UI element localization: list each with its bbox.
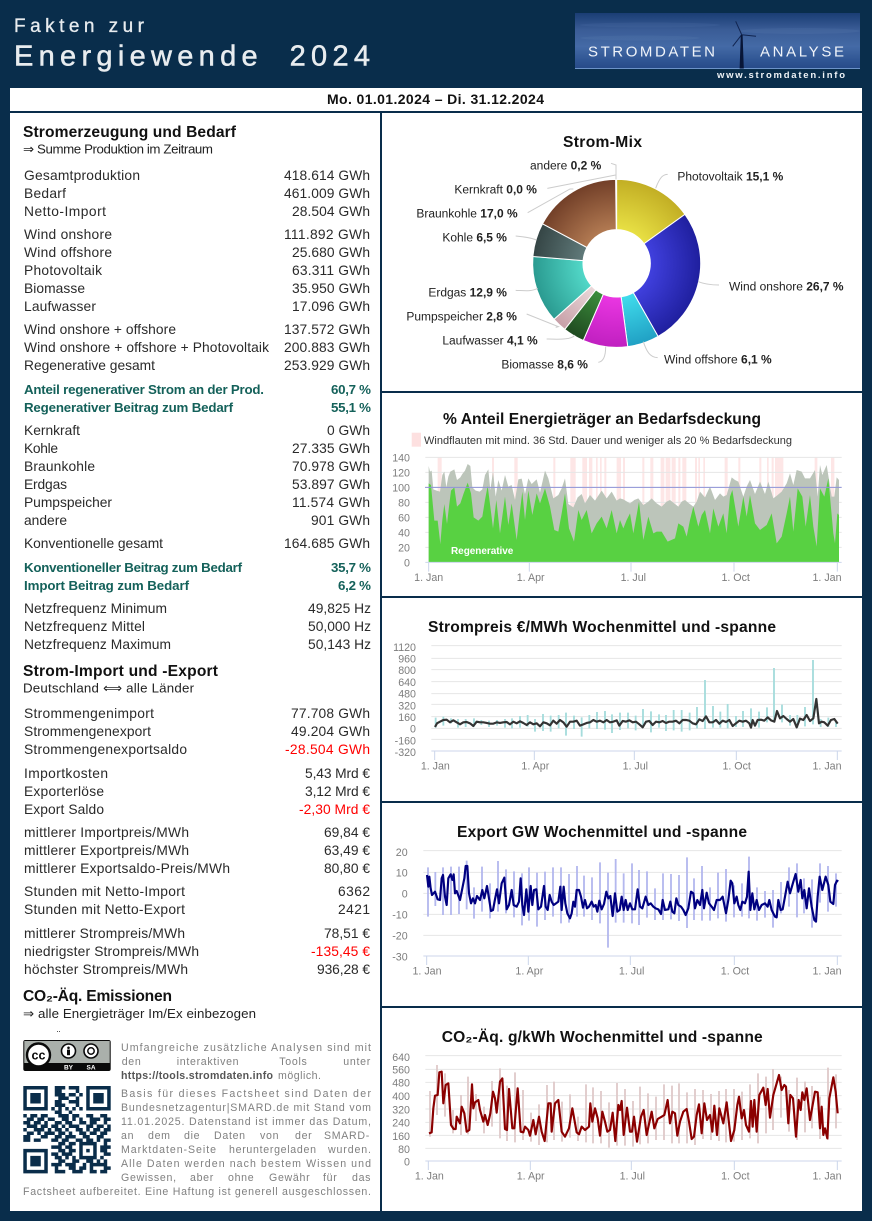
date bar: Mo. 01.01.2024 – Di. 31.12.2024 [327,91,544,107]
heading: Export: Export GW Wochenmittel und -spanne [457,824,747,841]
table: regenerativer Anteil: 60,7 % [331,382,371,397]
x axis: 1. Oct [721,1171,750,1183]
table: Produktion und Bedarf: 111.892 GWh [284,227,370,242]
text block: tools note: den [122,1056,141,1068]
y axis: 140 [392,453,410,465]
table: Produktion und Bedarf [24,168,370,373]
table: Strommengen und Kosten: 77.708 GWh [291,706,370,721]
text block: data source note: Daten [214,1130,246,1142]
x axis: 1. Apr [521,761,550,773]
logo: Stromdaten Analyse: www.stromdaten.info [716,70,845,81]
x axis: 1. Jan [812,761,842,773]
table: Netzfrequenz: Netzfrequenz Minimum [24,601,167,616]
table: Strommengen und Kosten: höchster Strompreis/MWh [24,962,188,977]
line chart: Export [392,847,842,978]
table: konventionelle Erzeugung: 70.978 GWh [292,459,370,474]
text block: tools note [121,1042,371,1082]
table: Strommengen und Kosten: Strommengenexportsaldo [24,742,187,757]
area chart: Bedarfsdeckung [392,453,842,584]
table: Produktion und Bedarf: 35.950 GWh [292,281,370,296]
table: Strommengen und Kosten: -28.504 GWh [285,742,370,757]
text block: data source note: für [323,1172,337,1184]
table: Produktion und Bedarf: Photovoltaik [24,263,102,278]
table: Strommengen und Kosten: 63,49 € [324,843,370,858]
y axis: 0 [410,724,416,736]
table: regenerativer Anteil: Regenerativer Beitrag zum Bedarf [24,400,234,415]
title: Fakten zur [14,16,145,37]
heading: CO2: CO₂-Äq. g/kWh Wochenmittel und -spanne [442,1028,763,1046]
x axis: 1. Jan [414,572,443,584]
table: Produktion und Bedarf: Regenerative gesamt [24,358,155,373]
text block: data source note: das [352,1172,371,1184]
table: konventionelle Erzeugung: Kernkraft [24,423,80,438]
y axis: 100 [392,483,410,495]
logo: Stromdaten Analyse: STROMDATEN [588,44,715,60]
y axis: 120 [392,468,410,480]
table: Netzfrequenz: Netzfrequenz Mittel [24,619,145,634]
text block: data source note: Bundesnetzagentur|SMARD.de mit Stand vom [121,1102,371,1114]
y axis: -20 [392,930,408,942]
panel: Strom-Mix [382,113,862,391]
y axis: -10 [392,909,408,921]
table: Strommengen und Kosten: Importkosten [24,766,108,781]
x axis: 1. Jan [812,1171,842,1183]
y axis: 400 [392,1091,410,1103]
subheading: Deutschland alle Länder: Deutschland ⟺ alle Länder [23,680,195,696]
table: Strommengen und Kosten: 3,12 Mrd € [305,784,370,799]
y axis: 320 [392,1104,410,1116]
table: Produktion und Bedarf: 418.614 GWh [284,168,370,183]
table: Strommengen und Kosten: Strommengenexport [24,724,151,739]
text block: data source note: Marktdaten-Seite [121,1144,216,1156]
donut chart [406,159,844,372]
x axis: 1. Apr [515,966,544,978]
text block: data source note: dem [148,1130,171,1142]
table: Produktion und Bedarf: 17.096 GWh [292,299,370,314]
table: Strommengen und Kosten: -135,45 € [311,944,370,959]
y axis: -160 [395,735,416,747]
text block: tools note: Umfangreiche zusätzliche Analysen sind mit [121,1042,371,1054]
x axis [421,761,842,773]
y axis: 160 [398,712,416,724]
x axis: 1. Jul [619,966,644,978]
y axis: 640 [398,677,416,689]
y axis: 10 [396,867,408,879]
pie labels: Pumpspeicher 2,8 % [406,310,517,324]
table: konventionelle Erzeugung: Braunkohle [24,459,95,474]
table: Strommengen und Kosten: niedrigster Strompreis/MWh [24,944,199,959]
text block: data source note: Basis für dieses Factsheet sind Daten der [121,1088,371,1100]
table: Produktion und Bedarf: Gesamtproduktion [24,168,140,183]
table: Produktion und Bedarf: Laufwasser [24,299,96,314]
y axis: 60 [398,513,410,525]
x axis: 1. Jul [620,1171,645,1183]
text block: data source note: an [121,1130,134,1142]
title: Energiewende 2024 [14,40,370,72]
y axis: 1120 [393,642,416,654]
table: Strommengen und Kosten: Stunden mit Netto-Export [24,902,185,917]
table: konventioneller Beitrag: 35,7 % [331,560,371,575]
x axis: 1. Jan [421,761,450,773]
legend: Windflauten: Windflauten mit mind. 36 Std. Dauer und weniger als 20 % Bedarfsdeckung [424,435,792,447]
table: Strommengen und Kosten: Exporterlöse [24,784,104,799]
heading: Strom-Mix: Strom-Mix [563,134,642,151]
x axis: 1. Jan [812,572,842,584]
y axis: 80 [398,498,410,510]
panel: Strompreis [382,598,862,801]
table: Strommengen und Kosten: 69,84 € [324,825,370,840]
text block: data source note: von [260,1130,279,1142]
y axis: 160 [392,1131,410,1143]
pie labels: Biomasse 8,6 % [501,358,588,372]
pie labels: Photovoltaik 15,1 % [677,170,784,184]
x axis: 1. Jul [623,761,648,773]
table: konventioneller Beitrag: Konventioneller Beitrag zum Bedarf [24,560,243,575]
panel: CO2 [382,1008,862,1211]
icon: Creative Commons BY-SA [23,1040,111,1072]
table: konventionelle Erzeugung: 53.897 GWh [292,477,370,492]
table: Netzfrequenz: Netzfrequenz Maximum [24,637,171,652]
table: Strommengen und Kosten: 80,80 € [324,861,370,876]
table: Strommengen und Kosten: 936,28 € [317,962,370,977]
table: Netzfrequenz: 50,000 Hz [308,619,371,634]
table: Strommengen und Kosten: -2,30 Mrd € [299,802,370,817]
text block: data source note: ohne [228,1172,254,1184]
text block: data source note: 11.01.2025. Datenstand ist immer das Datum, [121,1116,371,1128]
y axis: 560 [392,1065,410,1077]
table: regenerativer Anteil [24,382,371,415]
text block: data source note: der [295,1130,312,1142]
title [14,16,370,72]
icon: QR code [23,1088,111,1172]
text block: tools note: interaktiven [177,1056,239,1068]
table: Produktion und Bedarf: Wind onshore + offshore + Photovoltaik [24,340,269,355]
panel: Anteil Energieträger [382,393,862,596]
y axis [392,1052,410,1169]
table: konventionelle Erzeugung: 27.335 GWh [292,441,370,456]
pie labels: Laufwasser 4,1 % [442,334,538,348]
table: Produktion und Bedarf: 137.572 GWh [284,322,370,337]
table: Produktion und Bedarf: Wind onshore + offshore [24,322,176,337]
text block: data source note: heruntergeladen [229,1144,316,1156]
table: konventionelle Erzeugung: Pumpspeicher [24,495,112,510]
table: Strommengen und Kosten: mittlerer Exportsaldo-Preis/MWh [24,861,230,876]
table: Netzfrequenz [24,601,371,652]
pie labels: Kernkraft 0,0 % [454,183,537,197]
table: Produktion und Bedarf: 461.009 GWh [284,186,370,201]
table: Produktion und Bedarf: 25.680 GWh [292,245,370,260]
table: Produktion und Bedarf: Wind offshore [24,245,112,260]
text block: data source note: SMARD- [324,1130,370,1142]
text block: tools note: unter [343,1056,371,1068]
x axis [414,572,842,584]
table: konventionelle Erzeugung: Erdgas [24,477,67,492]
table: regenerativer Anteil: Anteil regenerativer Strom an der Prod. [24,382,264,397]
table: Produktion und Bedarf: Netto-Import [24,204,106,219]
x axis: 1. Jul [621,572,646,584]
table: konventionelle Erzeugung: andere [24,513,67,528]
text block: data source note: Gewähr [269,1172,310,1184]
y axis: 20 [396,847,408,859]
text block: tools note: https://tools.stromdaten.info [121,1070,274,1082]
icon: Creative Commons BY-SA: BY [64,1064,74,1072]
text block: data source note: wurden. [327,1144,371,1156]
heading: Stromerzeugung und Bedarf: Stromerzeugung und Bedarf [23,124,237,141]
text block: data source note: Gewissen, [121,1172,177,1184]
heading: Strom-Import und -Export: Strom-Import und -Export [23,663,218,680]
icon: Creative Commons BY-SA: cc [32,1048,45,1062]
table: konventionelle Erzeugung: 11.574 GWh [292,495,370,510]
table: Strommengen und Kosten: 5,43 Mrd € [305,766,370,781]
table: Strommengen und Kosten: mittlerer Importpreis/MWh [24,825,189,840]
table: Produktion und Bedarf: Wind onshore [24,227,112,242]
table: Strommengen und Kosten: Strommengenimport [24,706,154,721]
table: konventioneller Beitrag: 6,2 % [338,578,371,593]
y axis [393,642,416,759]
y axis [392,847,408,964]
x axis: 1. Jan [812,966,842,978]
icon: Creative Commons BY-SA: SA [86,1064,96,1072]
series label: Regenerative: Regenerative [451,546,514,557]
pie labels: Kohle 6,5 % [442,231,507,245]
y axis: -320 [395,747,416,759]
heading: Anteil Energieträger: % Anteil Energieträger an Bedarfsdeckung [443,411,761,428]
table: konventionelle Erzeugung [24,423,370,551]
heading: Strompreis: Strompreis €/MWh Wochenmittel und -spanne [428,619,776,636]
panel: Export [382,803,862,1006]
pie labels [406,159,844,372]
table: Strommengen und Kosten: mittlerer Strompreis/MWh [24,926,185,941]
y axis: 320 [398,700,416,712]
table: konventionelle Erzeugung: 0 GWh [327,423,370,438]
table: Strommengen und Kosten: 2421 [338,902,370,917]
y axis: 0 [402,888,408,900]
line chart: Strompreis [393,642,842,773]
table: Produktion und Bedarf: Bedarf [24,186,66,201]
x axis [415,1171,842,1183]
y axis: 240 [392,1118,410,1130]
pie labels: Erdgas 12,9 % [428,286,507,300]
y axis: 480 [392,1078,410,1090]
table: Produktion und Bedarf: 28.504 GWh [292,204,370,219]
table: Produktion und Bedarf: 200.883 GWh [284,340,370,355]
x axis: 1. Oct [721,966,749,978]
x axis [412,966,842,978]
text block: tools note: Tools [279,1056,308,1068]
y axis: 800 [398,665,416,677]
table: konventionelle Erzeugung: Konventionelle gesamt [24,536,163,551]
table: konventionelle Erzeugung: 901 GWh [311,513,370,528]
table: konventionelle Erzeugung: Kohle [24,441,58,456]
x axis: 1. Apr [517,572,545,584]
table: Produktion und Bedarf: 63.311 GWh [292,263,370,278]
x axis: 1. Oct [722,761,751,773]
y axis: 960 [398,653,416,665]
y axis [392,453,410,570]
table: Netzfrequenz: 49,825 Hz [308,601,371,616]
subheading: Energieträger: ⇒ alle Energieträger Im/Ex einbezogen [23,1006,256,1021]
table: Produktion und Bedarf: 253.929 GWh [284,358,370,373]
x axis: 1. Jan [412,966,442,978]
panel: key figures [10,113,380,1211]
logo: Stromdaten Analyse: ANALYSE [760,44,844,60]
table: Strommengen und Kosten [24,706,370,977]
y axis: 640 [392,1052,410,1064]
table: Strommengen und Kosten: Export Saldo [24,802,104,817]
table: konventionelle Erzeugung: 164.685 GWh [284,536,370,551]
pie labels: Wind offshore 6,1 % [664,353,772,367]
table: Strommengen und Kosten: 78,51 € [324,926,370,941]
x axis: 1. Oct [721,572,750,584]
table: konventioneller Beitrag: Import Beitrag zum Bedarf [24,578,190,593]
text block: data source note: aber [190,1172,214,1184]
text block: tools note: möglich. [278,1070,321,1082]
y axis: 20 [398,542,410,554]
table: Netzfrequenz: 50,143 Hz [308,637,371,652]
y axis: 40 [398,527,410,539]
y axis: 0 [404,1157,410,1169]
y axis: 480 [398,689,416,701]
text block: data source note: Alle Daten werden nach bestem Wissen und [121,1158,371,1170]
table: Strommengen und Kosten: 6362 [338,884,370,899]
table: Strommengen und Kosten: 49.204 GWh [291,724,370,739]
heading: CO2 Emissionen: CO₂-Äq. Emissionen [23,987,172,1005]
pie labels: andere 0,2 % [530,159,602,173]
text block: data source note: Factsheet aufbereitet. Eine Haftung ist generell ausgeschlossen. [23,1186,371,1198]
y axis: 0 [404,558,410,570]
y axis: -30 [392,952,408,964]
y axis: 80 [398,1144,410,1156]
x axis: 1. Jan [415,1171,444,1183]
line chart: CO2 [392,1052,842,1183]
subheading: Summe Produktion: ⇒ Summe Produktion im Zeitraum [23,142,213,156]
pie labels: Wind onshore 26,7 % [729,279,844,293]
table: Produktion und Bedarf: Biomasse [24,281,85,296]
table: regenerativer Anteil: 55,1 % [331,400,371,415]
table: Strommengen und Kosten: mittlerer Exportpreis/MWh [24,843,189,858]
date bar [10,88,862,111]
table: konventioneller Beitrag [24,560,371,593]
table: Strommengen und Kosten: Stunden mit Netto-Import [24,884,185,899]
pie labels: Braunkohle 17,0 % [416,207,518,221]
logo: Stromdaten Analyse [575,13,860,81]
x axis: 1. Apr [517,1171,545,1183]
text block: data source note: die [184,1130,200,1142]
text block: data source note [23,1088,371,1198]
